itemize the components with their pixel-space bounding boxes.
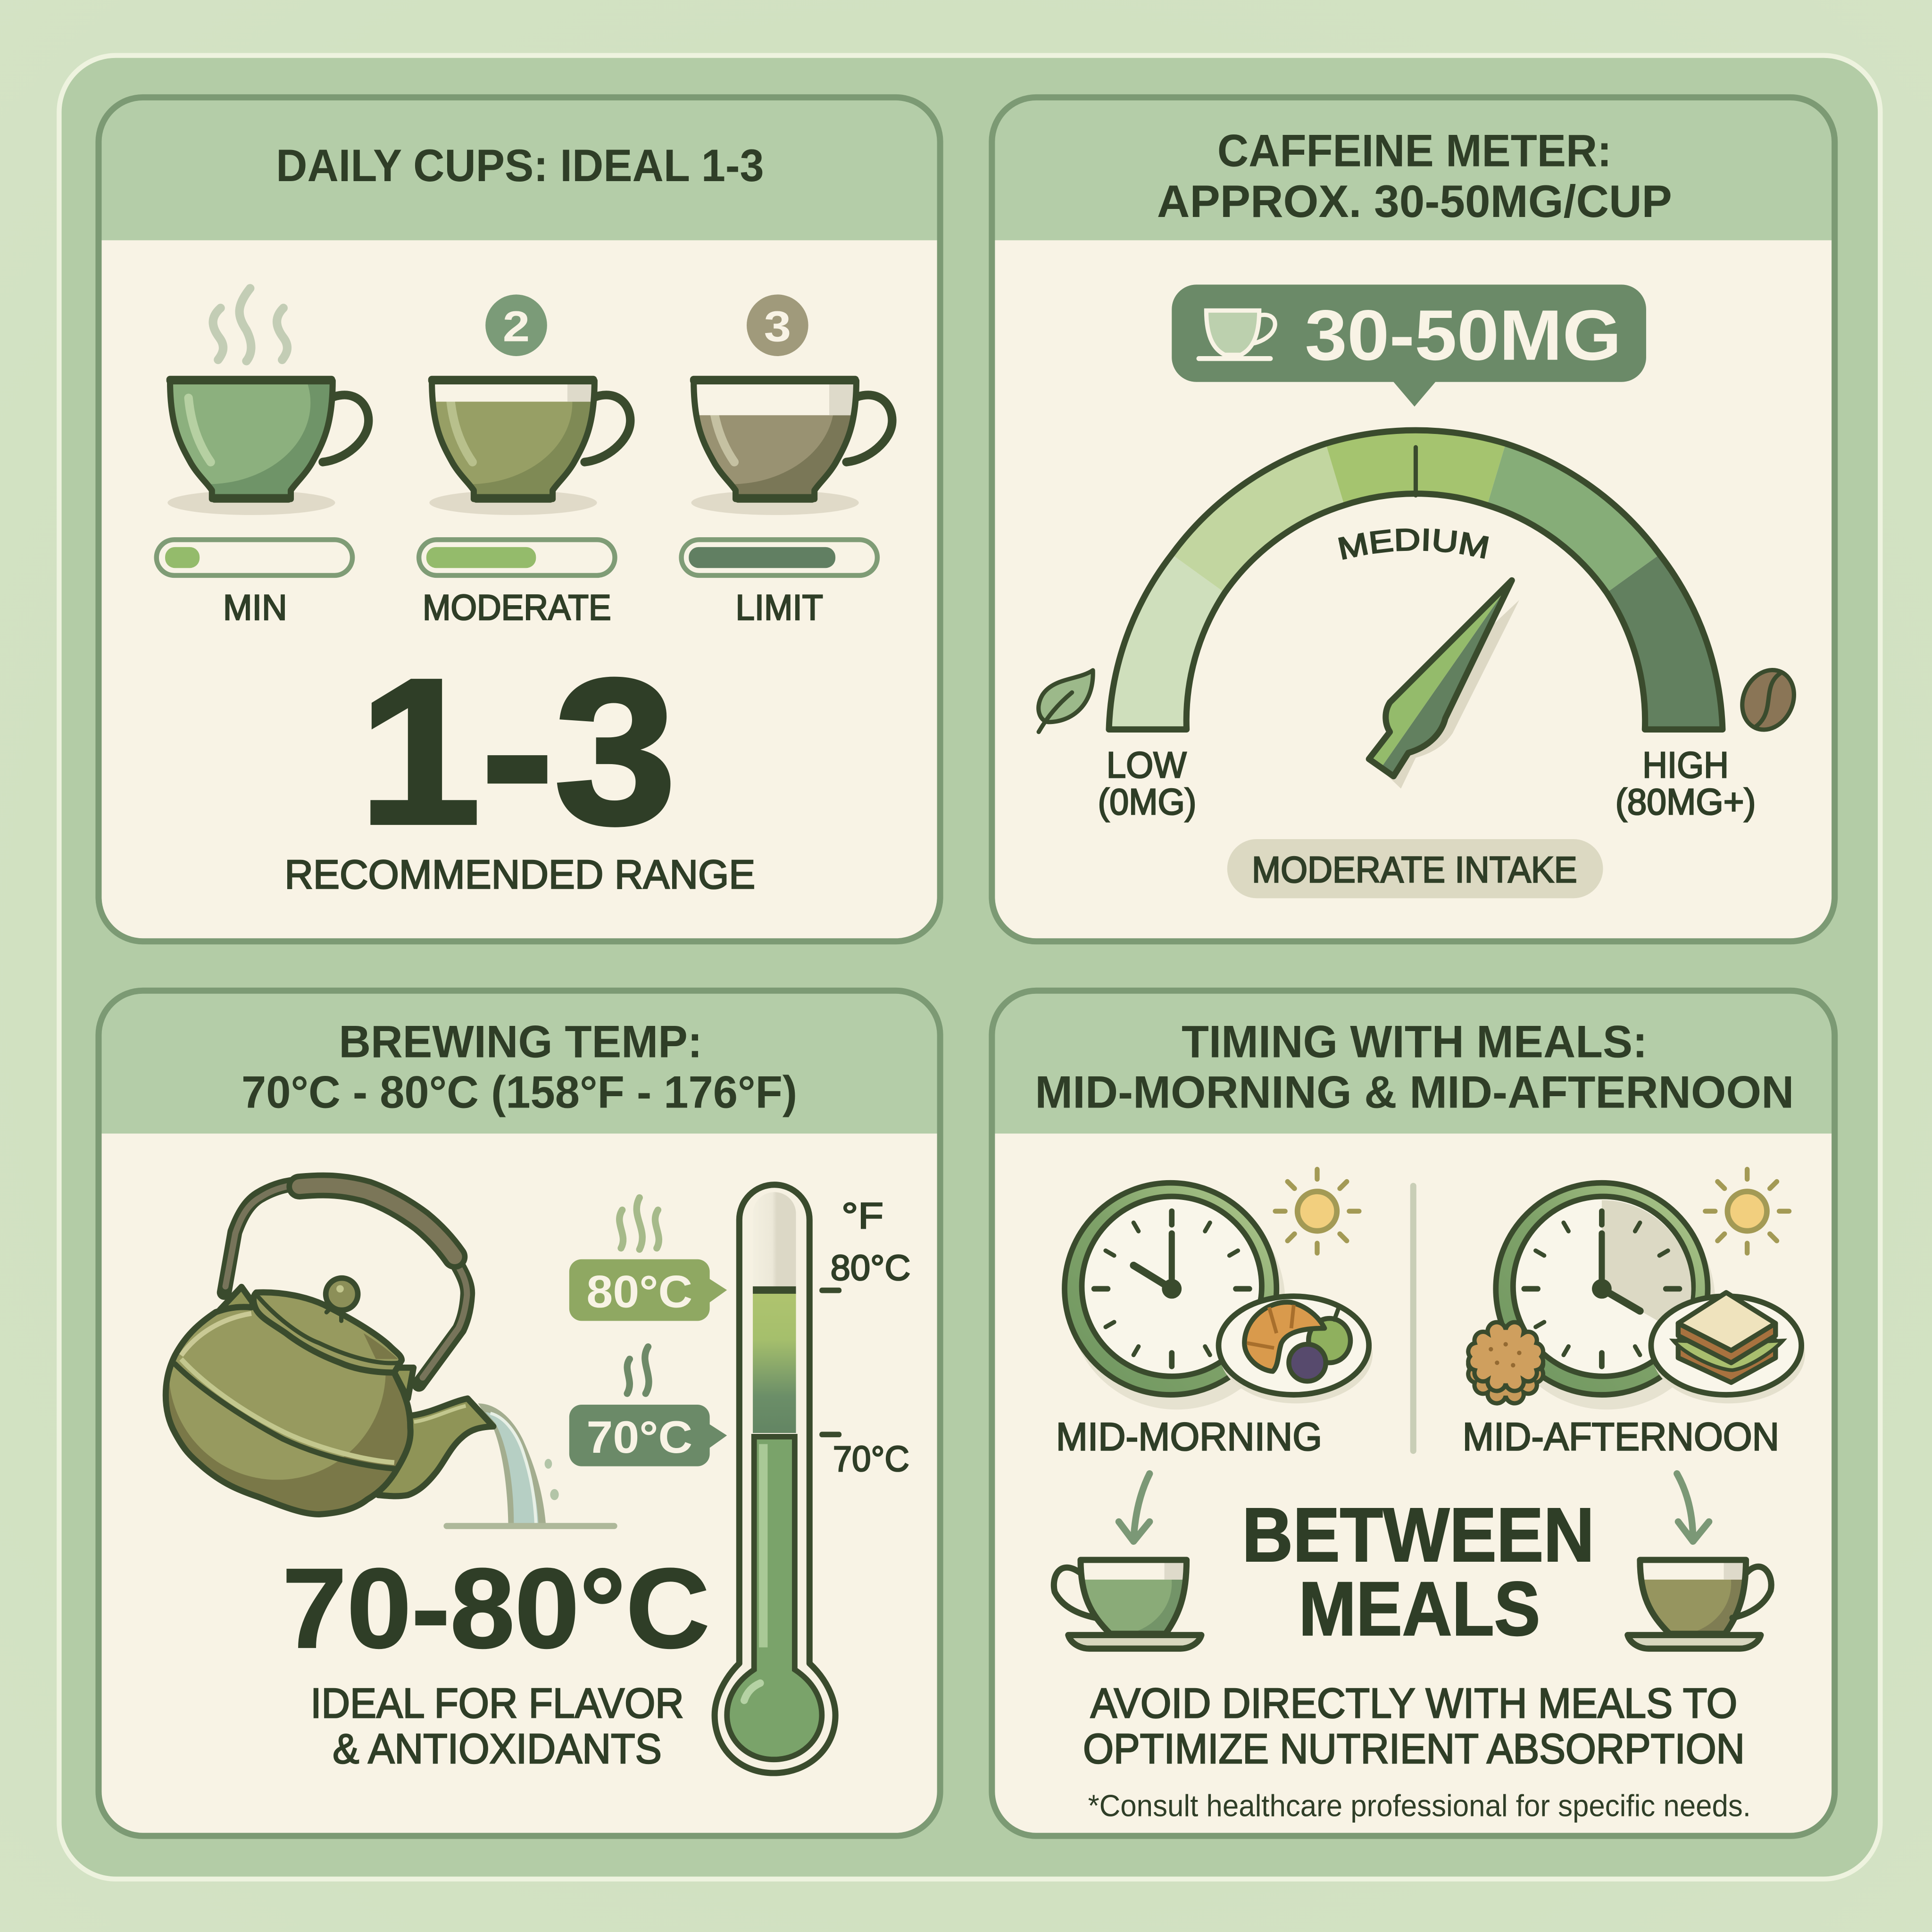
big text: between meals: [1242, 1492, 1594, 1651]
callout: 30-50mg: [1172, 284, 1646, 407]
caption: ideal for flavor: [310, 1680, 684, 1772]
label: low: LOW: [1107, 744, 1187, 785]
divider: [1410, 1183, 1416, 1454]
tag: 70C: [569, 1405, 727, 1466]
icon: cup right: [1618, 1532, 1771, 1649]
label: high: HIGH: [1642, 744, 1729, 785]
label: low: [1098, 744, 1196, 823]
pill: moderate intake: MODERATE INTAKE: [1252, 849, 1577, 890]
tag: 70C: 70°C: [586, 1412, 692, 1463]
icon: cookie: [1468, 1322, 1543, 1403]
scale label: 80C: 80°C: [831, 1248, 910, 1288]
icon: cup 3: [690, 375, 897, 515]
icon: cup left: [1054, 1532, 1201, 1649]
caption: avoid directly with meals: [1083, 1680, 1745, 1772]
badge: 2: 2: [503, 303, 530, 351]
heading: brewing temp: 70°C - 80°C (158°F - 176°F): [242, 1067, 797, 1117]
icon: breakfast plate: [1219, 1296, 1373, 1403]
label: low: (0MG): [1098, 781, 1196, 823]
progress bar: min: [157, 540, 352, 575]
icon: leaf: [1039, 670, 1093, 732]
tag: 80C: 80°C: [586, 1267, 692, 1317]
label: min: MIN: [223, 588, 287, 628]
progress bar: limit: [682, 540, 877, 575]
badge: 3: 3: [764, 303, 791, 351]
scale label: F: °F: [841, 1195, 883, 1236]
arrow: right: [1677, 1474, 1709, 1541]
icon: cup 2: [428, 375, 635, 515]
clock: mid-afternoon: [1496, 1183, 1715, 1409]
caption: ideal for flavor: IDEAL FOR FLAVOR: [310, 1680, 684, 1726]
gauge: [1109, 430, 1723, 729]
caption: ideal for flavor: & ANTIOXIDANTS: [333, 1725, 662, 1772]
tag: 80C: [569, 1259, 727, 1321]
heading: timing with meals: MID-MORNING & MID-AFTERNOON: [1035, 1067, 1794, 1117]
badge: 2: [485, 294, 547, 356]
icon: sandwich plate: [1651, 1292, 1805, 1403]
icon: sun morning: [1275, 1169, 1359, 1253]
panel: timing with meals: [992, 991, 1835, 1836]
kettle knob: [326, 1278, 358, 1321]
icon: kettle: [154, 1184, 617, 1529]
water pour: [443, 1403, 617, 1529]
caption: avoid directly with meals: OPTIMIZE NUTRIENT ABSORPTION: [1083, 1725, 1745, 1772]
icon: cup 1: [166, 375, 373, 515]
scale label: 70C: 70°C: [833, 1439, 909, 1479]
kettle lugs: [220, 1287, 414, 1399]
label: high: [1616, 744, 1756, 823]
arrow: left: [1119, 1474, 1149, 1541]
steam: 80: [619, 1198, 659, 1249]
kettle lid: [253, 1292, 402, 1373]
heading: brewing temp: [242, 1016, 797, 1117]
panel: caffeine meter: [992, 97, 1835, 941]
panel: daily cups: [99, 97, 940, 941]
caption: avoid directly with meals: AVOID DIRECTLY WITH MEALS TO: [1091, 1680, 1737, 1726]
big text: between meals: BETWEEN: [1242, 1492, 1594, 1578]
kettle spout: [378, 1399, 493, 1496]
heading: caffeine meter: APPROX. 30-50MG/CUP: [1157, 176, 1672, 227]
label: mid-morning: MID-MORNING: [1056, 1415, 1322, 1459]
pill: moderate intake: [1227, 839, 1603, 898]
caption: recommended range: RECOMMENDED RANGE: [284, 852, 755, 897]
badge: 3: [747, 294, 808, 356]
icon: coffee bean: [1733, 661, 1804, 738]
icon: sun afternoon: [1705, 1169, 1789, 1253]
heading: caffeine meter: [1157, 126, 1672, 227]
gauge needle: [1369, 580, 1519, 789]
icon: steam: [213, 288, 287, 361]
kettle body: [154, 1263, 425, 1528]
progress bar: moderate: [419, 540, 615, 575]
steam: 70: [627, 1347, 649, 1393]
heading: timing with meals: [1035, 1016, 1794, 1117]
icon: callout cup: [1196, 310, 1275, 361]
label: medium: MEDIUM: [1335, 522, 1492, 566]
heading: brewing temp: BREWING TEMP:: [339, 1016, 702, 1067]
clock: mid-morning: [1065, 1183, 1285, 1409]
big text: between meals: MEALS: [1299, 1566, 1540, 1651]
label: limit: LIMIT: [736, 588, 823, 628]
footnote: *Consult healthcare professional for specific needs.: [1088, 1788, 1751, 1823]
big number: 1-3: 1-3: [358, 636, 676, 867]
kettle handle: [224, 1184, 468, 1384]
heading: timing with meals: TIMING WITH MEALS:: [1182, 1016, 1648, 1067]
heading: daily cups: DAILY CUPS: IDEAL 1-3: [276, 141, 764, 191]
callout: 30-50mg: 30-50MG: [1305, 296, 1622, 375]
label: mid-afternoon: MID-AFTERNOON: [1463, 1415, 1779, 1459]
heading: caffeine meter: CAFFEINE METER:: [1217, 126, 1612, 176]
label: high: (80MG+): [1616, 781, 1756, 823]
label: moderate: MODERATE: [423, 588, 611, 628]
big number: 70-80C: 70-80°C: [282, 1545, 710, 1672]
panel: brewing temp: [99, 991, 940, 1836]
thermometer: [715, 1185, 841, 1773]
